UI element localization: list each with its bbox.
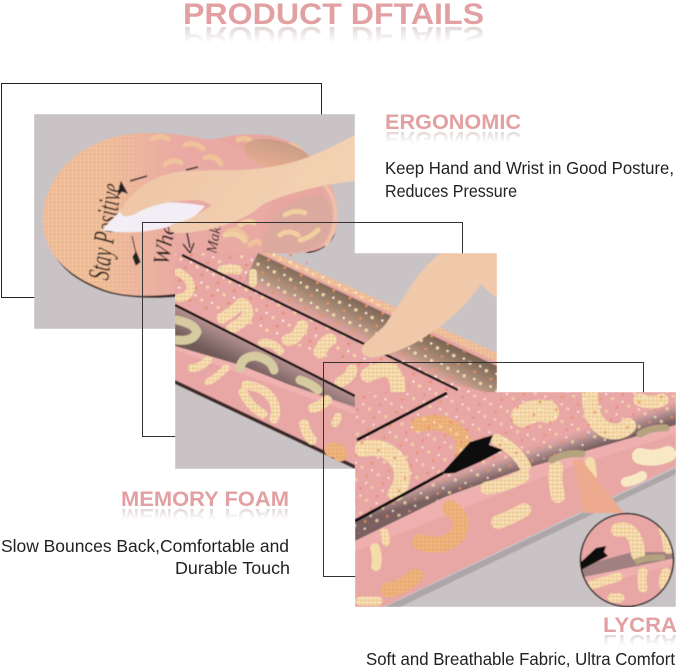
arrow xyxy=(355,393,447,521)
panel: memory foam photo xyxy=(175,253,497,469)
text: ergonomic description: Reduces Pressure xyxy=(385,181,517,201)
pad text: when life: When xyxy=(148,211,182,267)
leopard spots xyxy=(360,394,668,601)
heading: memory foam: MEMORY FOAM xyxy=(121,488,289,511)
frame: lycra outline xyxy=(324,362,644,576)
text: memory foam description: Slow Bounces Back,Comfortable and xyxy=(1,536,289,556)
heading: lycra: LYCRA xyxy=(603,614,677,637)
zoom circle xyxy=(580,514,676,606)
hand xyxy=(120,135,355,233)
title: product details xyxy=(183,0,484,53)
text: memory foam description: Durable Touch xyxy=(175,558,290,578)
heading: memory foam xyxy=(121,488,289,527)
mouse pad with wrist rest xyxy=(43,132,338,298)
title: product details: PRODUCT DFTAILS xyxy=(183,20,484,53)
heading: ergonomic: ERGONOMIC xyxy=(385,127,521,150)
heading: ergonomic: ERGONOMIC xyxy=(385,111,521,134)
heading: lycra: LYCRA xyxy=(603,630,677,653)
panel: ergonomic photo xyxy=(34,114,355,329)
pad text: when life xyxy=(153,226,222,262)
text: lycra description: Soft and Breathable Fabric, Ultra Comfort xyxy=(366,649,675,669)
frame: memory foam outline xyxy=(142,222,462,436)
panel: lycra photo xyxy=(355,392,676,607)
heading: memory foam: MEMORY FOAM xyxy=(121,504,289,527)
black lines xyxy=(175,255,458,396)
heading: ergonomic xyxy=(385,111,521,150)
mouse xyxy=(102,202,205,232)
heading: lycra xyxy=(603,614,677,653)
text: ergonomic description xyxy=(385,158,674,201)
pad text: stay positive: Stay Positive xyxy=(82,181,128,282)
text: ergonomic description: Keep Hand and Wrist in Good Posture, xyxy=(385,158,674,178)
frame: ergonomic outline xyxy=(2,84,322,298)
zoom cone xyxy=(573,459,624,513)
pad arrows xyxy=(118,167,198,265)
pad strip xyxy=(175,253,497,469)
leopard spots xyxy=(178,269,398,440)
pad text: when life: Make xyxy=(204,219,226,256)
text: memory foam description xyxy=(1,536,290,578)
hand: finger xyxy=(362,253,497,358)
pad strip xyxy=(355,392,676,607)
